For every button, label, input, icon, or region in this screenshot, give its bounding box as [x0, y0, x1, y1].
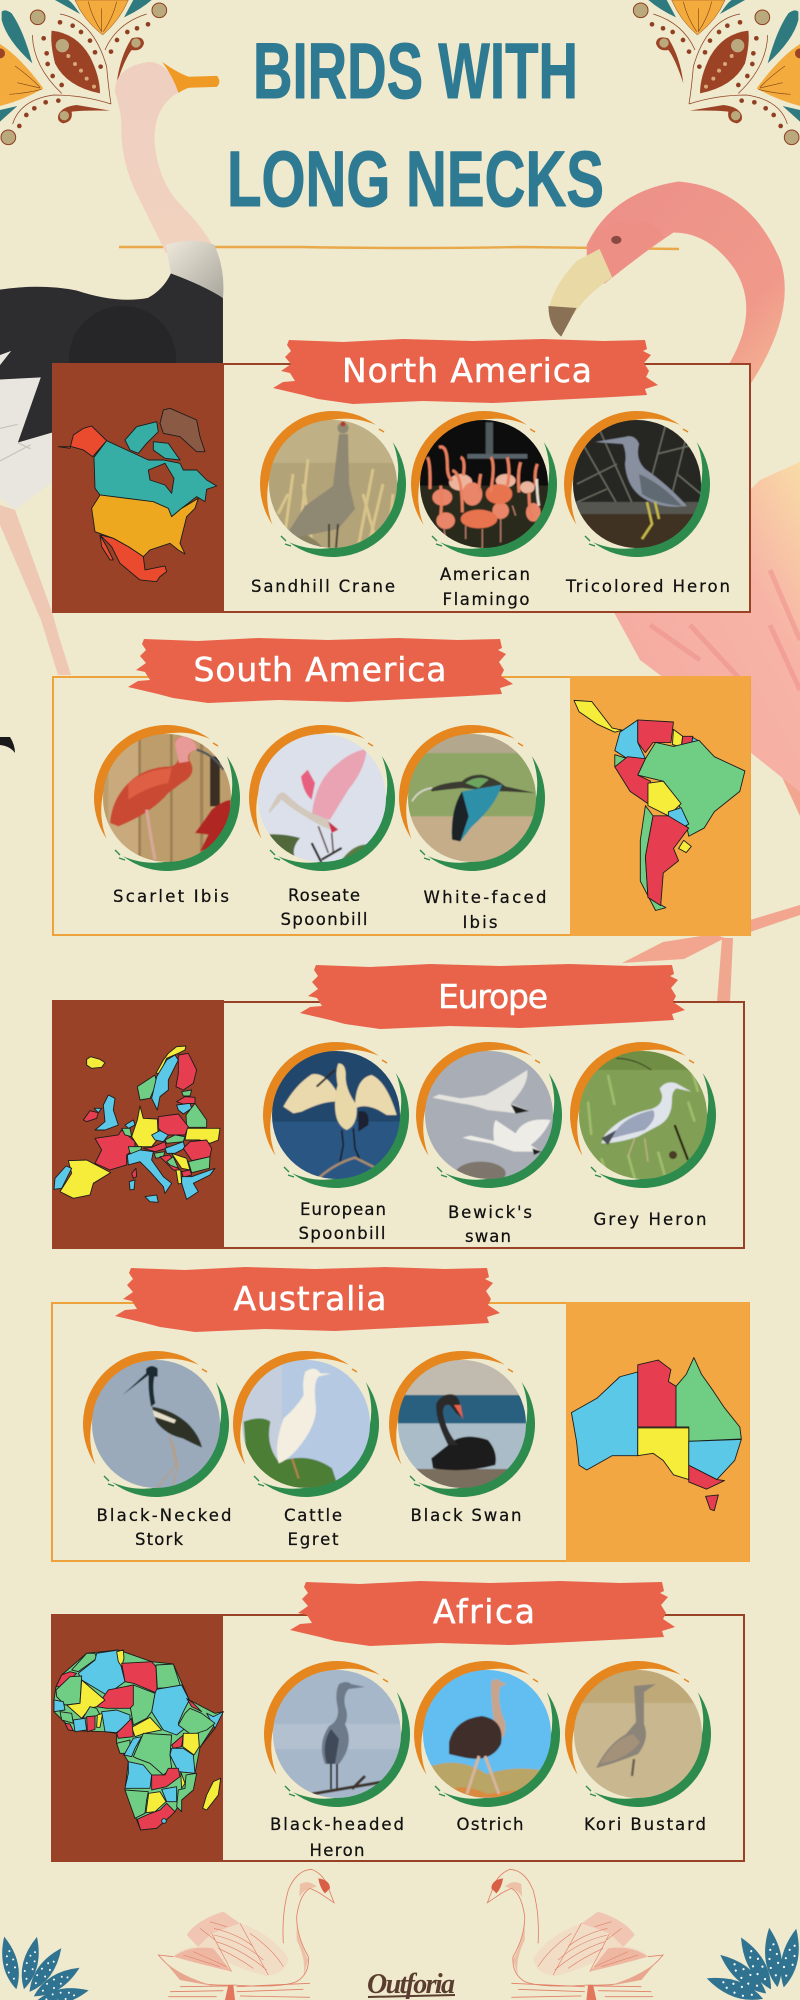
panel: South America	[53, 638, 750, 936]
decoration: leaves right	[704, 1927, 800, 2000]
title: LONG NECKS	[227, 134, 604, 223]
label: Bewick's swan	[448, 1203, 532, 1246]
rule under title	[119, 247, 679, 249]
title: BIRDS WITH	[253, 26, 578, 115]
decoration: corner mandala left	[0, 0, 167, 145]
banner: North America	[273, 339, 658, 404]
photo: American Flamingo	[411, 411, 557, 557]
photo: Grey Heron	[570, 1042, 716, 1188]
logo: Outforia: Outforia	[367, 1969, 455, 2000]
label: Black-headed Heron: Black-headed	[270, 1815, 404, 1834]
photo: White-faced Ibis	[399, 725, 545, 871]
banner: North America: North America	[342, 351, 592, 390]
label: American Flamingo: American	[440, 565, 530, 584]
label: Tricolored Heron: Tricolored Heron	[565, 577, 730, 596]
label: Cattle Egret	[284, 1506, 342, 1549]
panel: Europe	[52, 964, 744, 1249]
photo: Kori Bustard	[565, 1661, 711, 1807]
illustration: swan right	[487, 1869, 663, 2000]
banner: Australia: Australia	[234, 1279, 386, 1318]
label: Cattle Egret: Egret	[288, 1530, 339, 1549]
label: Bewick's swan: Bewick's	[448, 1203, 532, 1222]
banner: Africa: Africa	[433, 1592, 535, 1631]
banner: Europe: Europe	[438, 977, 548, 1016]
panel: Africa	[51, 1581, 744, 1862]
label: Scarlet Ibis: Scarlet Ibis	[113, 887, 229, 906]
label: European Spoonbill	[298, 1200, 386, 1243]
label: Kori Bustard: Kori Bustard	[584, 1815, 706, 1834]
photo: Scarlet Ibis	[94, 725, 240, 871]
illustration: flamingo	[548, 182, 800, 1002]
label: Black-headed Heron: Heron	[310, 1841, 364, 1860]
photo: Ostrich	[414, 1661, 560, 1807]
map block: South America	[570, 676, 750, 936]
photo: European Spoonbill	[263, 1042, 409, 1188]
label: European Spoonbill: European	[300, 1200, 386, 1219]
label: Black-Necked Stork: Black-Necked	[96, 1506, 232, 1525]
label: White-faced Ibis	[424, 888, 546, 932]
label: Black-Necked Stork	[96, 1506, 232, 1549]
photo: Bewick's swan	[416, 1042, 562, 1188]
decoration: leaves left	[0, 1935, 90, 2000]
label: Black Swan: Black Swan	[410, 1506, 522, 1525]
banner: South America	[128, 638, 513, 703]
photo: Roseate Spoonbill	[249, 725, 395, 871]
photo: Black-Necked Stork	[83, 1351, 229, 1497]
photo: Tricolored Heron	[564, 411, 710, 557]
label: Roseate Spoonbill: Spoonbill	[280, 910, 368, 929]
label: American Flamingo: Flamingo	[442, 590, 530, 609]
banner: South America: South America	[194, 650, 446, 689]
map block: Africa	[51, 1614, 223, 1862]
label: White-faced Ibis: Ibis	[462, 913, 498, 932]
label: American Flamingo	[440, 565, 530, 609]
illustration: swan left	[158, 1869, 334, 2000]
photo: Black Swan	[389, 1351, 535, 1497]
label: Grey Heron: Grey Heron	[594, 1210, 706, 1229]
illustration: ostrich	[0, 62, 223, 675]
panel: Australia	[52, 1267, 749, 1562]
label: Black-headed Heron	[270, 1815, 404, 1860]
banner: Australia	[115, 1267, 500, 1332]
map block: North America	[52, 363, 224, 613]
label: Roseate Spoonbill: Roseate	[288, 886, 360, 905]
label: Bewick's swan: swan	[465, 1227, 511, 1246]
label: Ostrich: Ostrich	[456, 1815, 524, 1834]
illustration: black feather tip	[0, 737, 15, 753]
label: European Spoonbill: Spoonbill	[298, 1224, 386, 1243]
label: Roseate Spoonbill	[280, 886, 368, 929]
banner: Africa	[290, 1581, 675, 1646]
label: Black-Necked Stork: Stork	[135, 1530, 183, 1549]
photo: Black-headed Heron	[264, 1661, 410, 1807]
label: White-faced Ibis: White-faced	[424, 888, 546, 907]
map block: Australia	[566, 1302, 749, 1562]
banner: Europe	[300, 964, 685, 1029]
title	[227, 26, 604, 223]
decoration: corner mandala right	[633, 0, 800, 145]
photo: Cattle Egret	[233, 1351, 379, 1497]
label: Sandhill Crane: Sandhill Crane	[251, 577, 395, 596]
photo: Sandhill Crane	[260, 411, 406, 557]
panel: North America	[52, 339, 750, 613]
label: Cattle Egret: Cattle	[284, 1506, 342, 1525]
map block: Europe	[52, 1000, 224, 1249]
